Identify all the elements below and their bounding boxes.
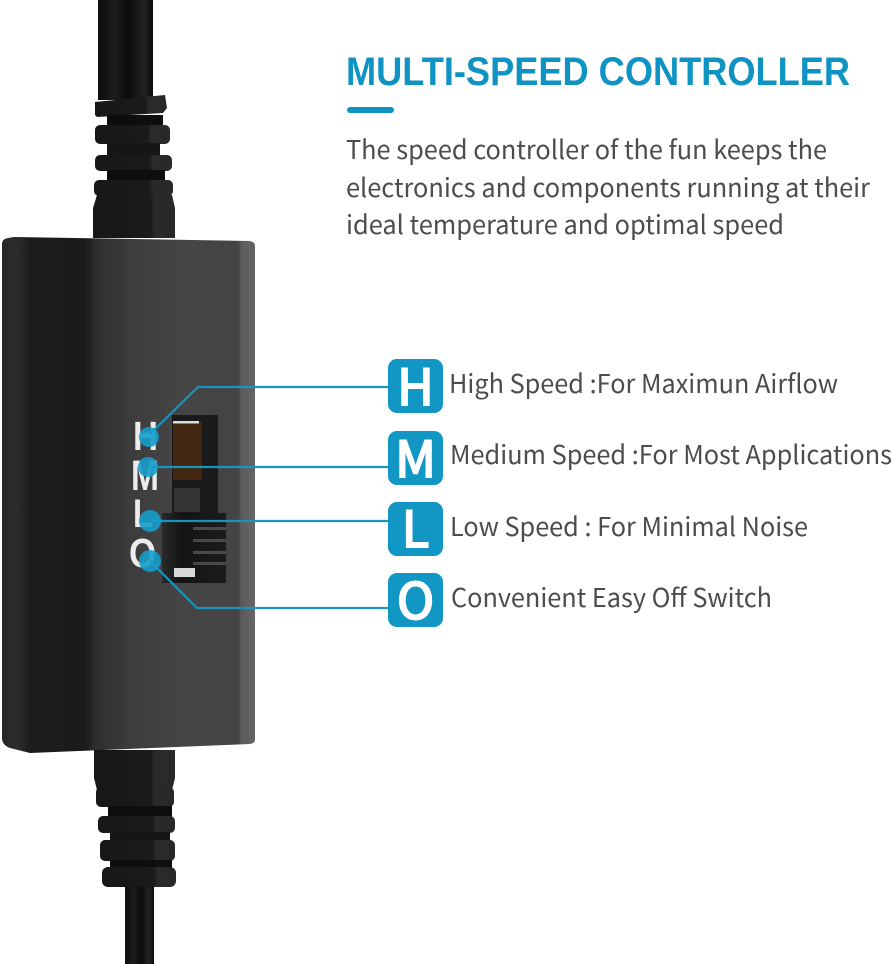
- bottom cable: [125, 886, 154, 964]
- badge: O: [388, 562, 443, 634]
- title: MULTI-SPEED CONTROLLER: [346, 50, 850, 94]
- badge: H: [388, 348, 443, 420]
- badge: O: O: [397, 562, 434, 634]
- controller housing: [2, 237, 255, 753]
- description: ideal temperature and optimal speed: [346, 205, 784, 242]
- H M L O labels on the housing: L: [133, 492, 153, 536]
- badge: L: [388, 490, 443, 562]
- badge: H: H: [397, 348, 434, 420]
- H M L O labels on the housing: [129, 413, 159, 576]
- label: low speed: Low Speed : For Minimal Noise: [450, 507, 808, 544]
- badge: L: L: [402, 490, 429, 562]
- top strain relief: [93, 95, 175, 238]
- description: The speed controller of the fun keeps the: [346, 130, 827, 167]
- description: electronics and components running at their: [346, 168, 871, 205]
- slider switch: [162, 415, 226, 583]
- label: medium speed: Medium Speed :For Most Applications: [450, 435, 892, 472]
- description: [346, 130, 871, 242]
- callout lines and dots: [138, 387, 390, 608]
- label: high speed: High Speed :For Maximun Airflow: [449, 364, 838, 401]
- bottom strain relief: [94, 750, 176, 887]
- H M L O labels on the housing: M: [131, 452, 159, 500]
- title underline: [347, 107, 394, 113]
- top cable: [98, 0, 153, 100]
- label: off switch: Convenient Easy Off Switch: [451, 578, 772, 615]
- H M L O labels on the housing: O: [129, 530, 156, 576]
- badge: M: M: [395, 420, 436, 492]
- H M L O labels on the housing: H: [133, 413, 158, 459]
